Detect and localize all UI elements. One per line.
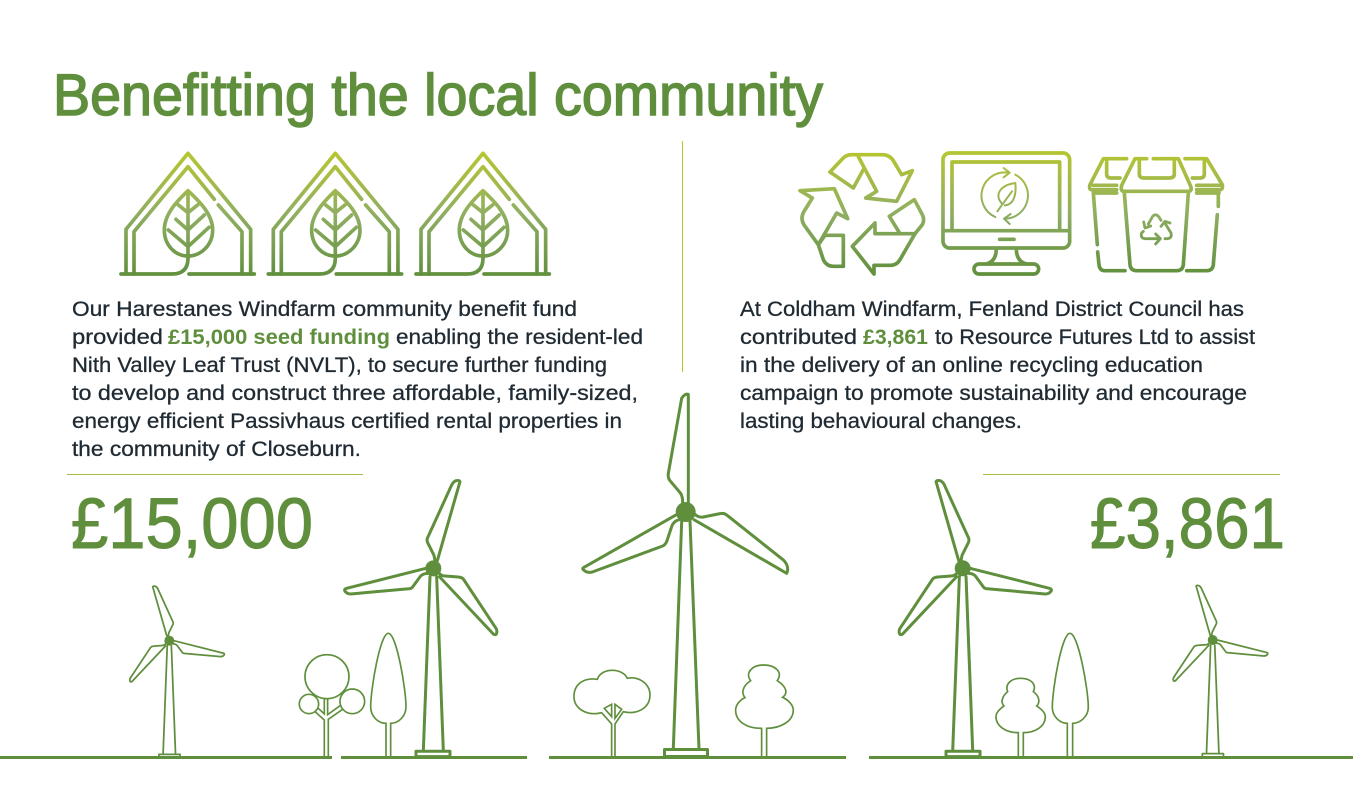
title: Benefitting the local community [53, 63, 823, 128]
left body text: Nith Valley Leaf Trust (NVLT), to secure further funding [72, 354, 607, 377]
right body text: in the delivery of an online recycling education [740, 354, 1203, 377]
left body text: provided [72, 326, 163, 349]
left body text [72, 298, 643, 461]
left body text: Our Harestanes Windfarm community benefit fund [72, 298, 577, 321]
wind turbine: small left [130, 586, 224, 758]
icons: three leaf houses [121, 153, 549, 274]
wind turbine: medium left [345, 480, 497, 757]
icon: recycling bins [1090, 159, 1222, 271]
icon: recycling arrows [800, 155, 924, 274]
left body text: to develop and construct three affordable, family-sized, [72, 382, 638, 405]
right body text: to Resource Futures Ltd to assist [935, 326, 1255, 349]
stat: 15,000: £15,000 [71, 485, 313, 564]
stat: 3,861: £3,861 [1090, 485, 1285, 564]
right body text: campaign to promote sustainability and encourage [740, 382, 1247, 405]
icon: leaf house 2 [268, 153, 402, 274]
left body text: the community of Closeburn. [72, 438, 361, 461]
wind turbine: small right [1173, 585, 1268, 757]
right body text: contributed [740, 326, 857, 349]
right body text: lasting behavioural changes. [740, 410, 1022, 433]
icon: monitor with leaf [943, 153, 1070, 274]
left body text: enabling the resident-led [396, 326, 643, 349]
tree: three-circle [299, 655, 365, 757]
tree: tiered centre [736, 665, 793, 757]
tree: poplar left [371, 633, 406, 757]
left body text: energy efficient Passivhaus certified rental properties in [72, 410, 622, 433]
icon: leaf house 1 [121, 153, 254, 274]
right body text: £3,861 [863, 326, 928, 349]
right rule [983, 474, 1280, 475]
left rule [67, 474, 363, 475]
centre divider [682, 141, 683, 372]
right body text [740, 298, 1255, 433]
wind turbine: large centre [583, 394, 788, 756]
tree: cloud [574, 670, 650, 757]
wind turbine: medium right [899, 480, 1051, 757]
tree: poplar right [1052, 633, 1088, 757]
left body text: £15,000 seed funding [168, 326, 390, 349]
icon: leaf house 3 [416, 153, 549, 274]
right body text: At Coldham Windfarm, Fenland District Council has [740, 298, 1244, 321]
ground line [0, 756, 1353, 759]
tree: tiered right [996, 678, 1045, 757]
